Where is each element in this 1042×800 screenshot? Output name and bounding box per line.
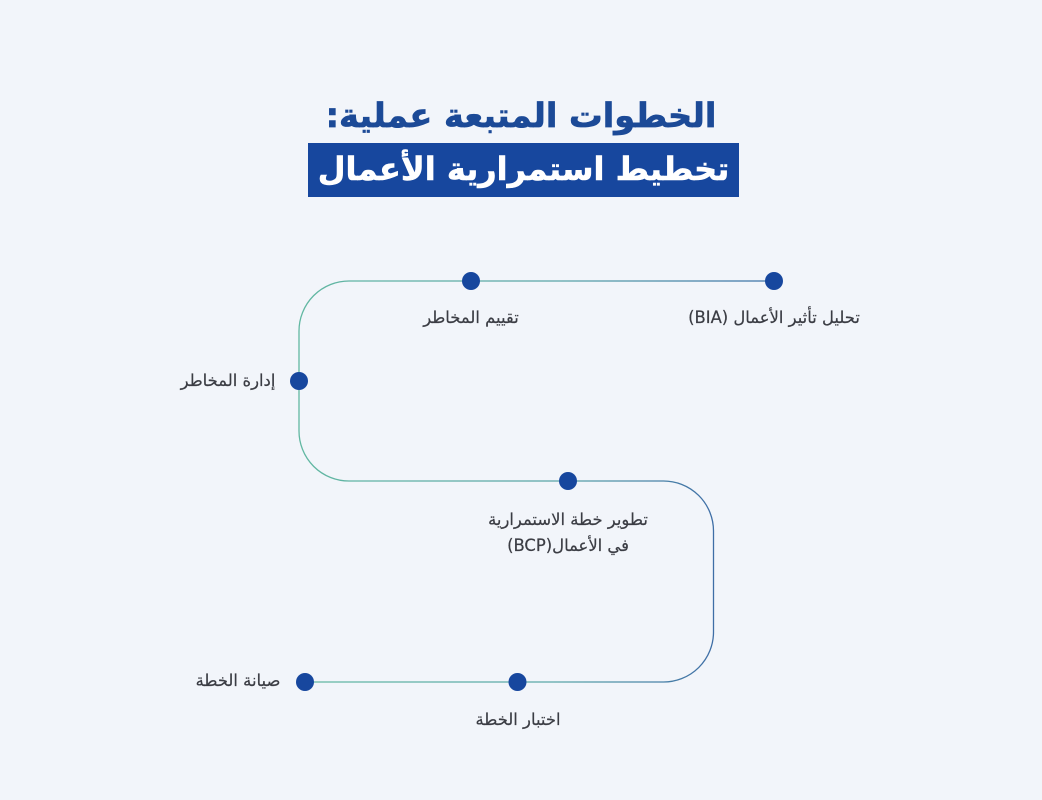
title highlighted banner [308,143,739,197]
connector line: upper section [299,281,774,481]
marker: business impact analysis [765,272,783,290]
marker: risk management [290,372,308,390]
label: risk management: إدارة المخاطر [181,371,275,390]
title highlighted banner: تخطيط استمرارية الأعمال [318,150,729,188]
label: BCP development: تطوير خطة الاستمرارية [488,510,648,529]
label: risk assessment: تقييم المخاطر [423,308,519,327]
label: business impact analysis: تحليل تأثير الأعمال (BIA) [688,308,860,327]
marker: BCP development [559,472,577,490]
marker: plan maintenance [296,673,314,691]
label: BCP development: في الأعمال(BCP) [507,536,629,555]
label: BCP development [488,510,648,556]
connector line: lower section [305,481,714,682]
marker: plan testing [508,673,526,691]
title line 1: الخطوات المتبعة عملية: [326,96,716,135]
marker: risk assessment [462,272,480,290]
label: plan testing: اختبار الخطة [475,710,561,729]
label: plan maintenance: صيانة الخطة [196,671,280,690]
